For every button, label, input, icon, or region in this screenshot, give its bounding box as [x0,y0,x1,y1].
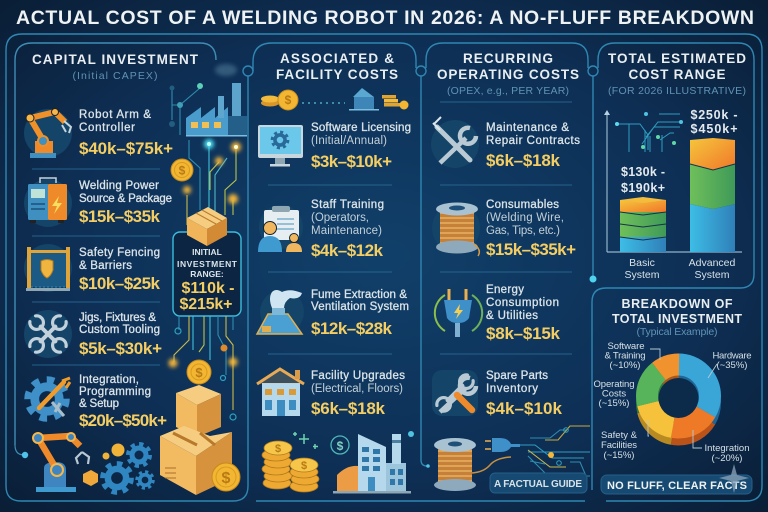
icon: house [257,369,304,416]
label line 2: Ventilation System [311,301,409,313]
bar: advanced system [690,138,735,252]
icon: wire spool [432,202,480,256]
label: Welding Power [79,180,159,192]
label: software: Software [608,341,644,352]
icon: coin [171,159,193,181]
label line 2: Controller [79,122,135,134]
panel heading: BREAKDOWN OF [622,297,733,311]
icon: wrenches [24,310,72,358]
panel heading line 2: OPERATING COSTS [437,67,579,82]
item: spare parts [432,370,563,418]
building [358,434,386,491]
item: software licensing [258,122,411,171]
panel heading line 2: TOTAL INVESTMENT [612,312,742,326]
item: jigs [24,310,162,358]
leader lines [648,349,717,448]
price: $15k–$35k [79,207,161,226]
label: hardware: (~35%) [717,360,747,371]
item: maintenance [431,117,580,170]
label line 2: (Operators, [311,212,369,224]
price: $15k–$35k+ [486,240,576,259]
label: integration: Integration [704,443,750,454]
icon: wrench and screwdriver [432,370,478,416]
label line 2: & Barriers [79,260,132,272]
panel: breakdown of total investment [594,297,752,494]
label: Fume Extraction & [311,289,407,301]
panel subheading: (Initial CAPEX) [72,70,158,82]
label: safety [601,430,638,461]
panel: capital investment [15,43,216,492]
icon strip: coins and bank: $ [285,93,292,107]
label: Maintenance & [486,122,569,134]
label line 3: Gas, Tips, etc.) [486,225,560,237]
panel: total estimated cost range [604,51,746,281]
label line 3: Maintenance) [311,225,382,237]
label: operating: Costs [602,388,626,400]
illustration: stacked boxes and coins [160,316,240,495]
illustration: spool and plug [434,426,590,491]
label: Safety Fencing [79,247,160,259]
icon: plug [435,289,482,337]
item: integration [28,374,167,430]
dollar mark 2: $ [301,460,307,472]
coin stack [262,441,319,492]
item: fume extraction [257,289,409,338]
label: integration: (~20%) [712,453,742,464]
label: software: (~10%) [610,360,640,371]
price: $12k–$28k [311,319,393,338]
label line 2: Consumption [486,297,559,309]
panel heading: ASSOCIATED & [280,51,394,66]
panel outline [15,43,216,445]
item: robot arm [24,108,173,158]
lower box [160,426,232,456]
circuit decor [617,114,681,152]
label: Consumables [486,199,559,211]
price: $4k–$10k [486,399,563,418]
panel heading: CAPITAL INVESTMENT [32,52,199,67]
item: energy [435,284,561,343]
panel subheading: (OPEX, e.g., PER YEAR) [447,85,569,97]
label: software: & Training [604,350,646,362]
dollar ring [331,436,349,454]
badge: no fluff, clear facts: NO FLUFF, CLEAR FACTS [607,480,747,492]
icon: bottom coin [212,463,240,491]
price: $20k–$50k+ [79,411,167,430]
callout box [173,232,241,316]
circuits [174,316,233,410]
panel subheading: (FOR 2026 ILLUSTRATIVE) [608,85,746,97]
illustration: robot arm and gears [33,433,153,492]
panel heading line 2: FACILITY COSTS [276,67,398,82]
illustration: factory and circuits [169,64,247,225]
connector line [15,445,24,455]
icon: welding power source [24,178,72,227]
label: INITIAL [192,247,222,257]
bar chart [604,108,742,281]
price: $8k–$15k [486,324,561,343]
label: Jigs, Fixtures & [79,312,156,324]
axis label: basic: Basic [629,257,655,269]
label line 3: & Utilities [486,310,538,322]
axes [607,113,742,252]
amount line 2: $215k+ [180,296,232,313]
circuit nodes [172,88,200,135]
axis label: basic line 2: System [624,269,660,281]
badge: a factual guide [490,473,587,493]
icon: top coin [187,360,211,384]
panel heading line 2: COST RANGE [628,67,726,82]
value: advanced: $250k - [690,108,738,122]
label line 2: Repair Contracts [486,135,580,147]
label: Software Licensing [311,122,411,134]
label: Robot Arm & [79,109,151,121]
label line 2: Programming [79,386,151,398]
plug [492,438,520,452]
icon: bottom coin: $ [222,470,231,487]
price: $3k–$10k+ [311,152,392,171]
item: safety fencing [24,244,161,293]
icon: fume hood [257,290,304,334]
icon strip: coins and bank [261,88,408,110]
label line 2: Inventory [486,383,538,395]
item: welding power [24,178,172,227]
spool [438,446,472,484]
label: safety: Facilities [601,440,637,451]
icon: monitor [258,125,303,166]
donut depth [647,372,710,434]
icon: robot arm [24,108,72,158]
donut top [647,364,710,428]
factory [186,107,228,135]
axis label: advanced line 2: System [694,269,730,281]
label: hardware [712,350,752,371]
price: $5k–$30k+ [79,339,162,358]
panel subheading: (Typical Example) [636,326,718,338]
title: ACTUAL COST OF A WELDING ROBOT IN 2026: A NO-FLUFF BREAKDOWN [16,7,754,29]
label: software [604,341,646,371]
price: $6k–$18k [486,151,561,170]
axis label: advanced: Advanced [689,257,736,269]
icon: safety fence [24,244,72,292]
label line 2: (Electrical, Floors) [311,383,403,395]
value: basic line 2: $190k+ [621,181,665,195]
label line 3: RANGE: [190,269,224,279]
label: Facility Upgrades [311,370,405,382]
circuits [520,426,590,476]
panel: associated and facility costs [257,51,411,494]
price: $4k–$12k [311,241,384,260]
dollar mark: $ [275,443,281,455]
panel heading: TOTAL ESTIMATED [608,51,746,66]
sparkle [719,464,749,493]
illustration: coin stacks and factory [262,432,411,494]
value: basic: $130k - [621,165,665,179]
label: Staff Training [311,199,384,211]
label: integration [704,443,750,464]
price: $40k–$75k+ [79,139,173,158]
icon: box [187,207,227,246]
label line 2: (Initial/Annual) [311,135,387,147]
amount: $110k - [182,280,234,297]
donut hole [658,378,698,418]
label line 3: & Setup [79,398,119,410]
upper box [176,385,221,405]
icon: top coin: $ [195,365,203,380]
label: operating: Operating [594,379,634,390]
icon: coin: $ [179,164,186,178]
icon: gear and wrench [28,378,70,418]
label: hardware: Hardware [712,350,752,362]
label line 2: Custom Tooling [79,324,160,336]
item: staff training [258,199,384,260]
label: Integration, [79,374,139,386]
panel heading: RECURRING [463,51,553,66]
item: consumables [432,199,576,259]
value: advanced line 2: $450k+ [690,122,738,136]
smoke [215,64,237,76]
label: safety: (~15%) [604,450,634,461]
badge: a factual guide: A FACTUAL GUIDE [494,479,582,490]
donut chart [647,349,717,448]
bar: basic system [620,197,666,252]
sparkles [293,432,318,449]
dollar ring: $ [337,439,344,453]
label: operating [594,379,634,409]
label: safety: Safety & [601,430,638,441]
price: $10k–$25k [79,274,161,293]
label: Spare Parts [486,370,548,382]
price: $6k–$18k [311,399,386,418]
icon: wrench and plug [431,117,479,168]
icon: trainer and clipboard [258,205,303,252]
label line 2: Source & Package [79,193,172,205]
label line 2: (Welding Wire, [486,212,564,224]
badge: no fluff, clear facts [601,475,752,494]
circuits up from box [187,140,236,225]
glow dot [22,452,28,458]
label: operating: (~15%) [599,398,629,409]
panel: recurring operating costs [431,51,590,493]
callout: initial investment range [173,207,241,316]
label line 2: INVESTMENT [177,259,238,269]
item: facility upgrades [257,369,405,418]
label: Energy [486,284,524,296]
